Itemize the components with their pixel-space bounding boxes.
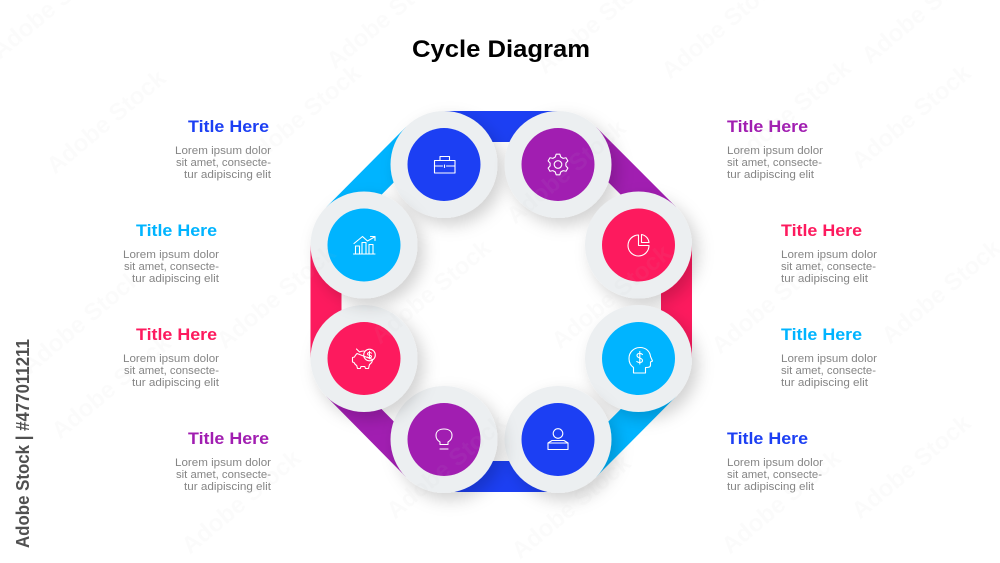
node: growth chart: [310, 192, 418, 298]
icon: growth chart: [354, 236, 375, 254]
icon: person: [548, 429, 568, 450]
text block: right 3: [781, 325, 877, 389]
text block: right 4: [727, 429, 823, 493]
text block: left 2: Lorem ipsum dolor: [123, 249, 219, 261]
icon: light bulb: [436, 429, 452, 449]
watermark pattern: Adobe Stock: [42, 64, 172, 180]
text block: left 1: tur adipiscing elit: [184, 169, 271, 181]
text block: right 3: Lorem ipsum dolor: [781, 353, 877, 365]
ring segment: bottom-left purple: [326, 375, 428, 477]
text block: right 2: tur adipiscing elit: [781, 273, 868, 285]
watermark pattern: Adobe Stock: [717, 444, 847, 560]
icon: pie chart: [628, 234, 649, 256]
text block: left 2: [123, 221, 219, 285]
text block: left 1: [175, 117, 271, 181]
node: gear: [504, 111, 612, 218]
watermark pattern: Adobe Stock: [212, 239, 342, 355]
text block: left 2: Title Here: [136, 221, 217, 240]
text block: right 2: Title Here: [781, 221, 862, 240]
node: piggy bank: [310, 305, 418, 412]
text block: left 3: Title Here: [136, 325, 217, 344]
node: briefcase: [390, 111, 498, 218]
text block: left 1: sit amet, consecte-: [176, 157, 271, 169]
watermark pattern: Adobe Stock: [47, 329, 177, 445]
icon: gear: [548, 154, 568, 175]
text block: left 4: Lorem ipsum dolor: [175, 457, 271, 469]
watermark pattern: Adobe Stock: [727, 54, 857, 170]
watermark pattern: Adobe Stock: [382, 409, 512, 525]
text block: right 3: tur adipiscing elit: [781, 377, 868, 389]
text block: left 4: sit amet, consecte-: [176, 469, 271, 481]
text block: right 4: Lorem ipsum dolor: [727, 457, 823, 469]
ring segment: left crimson: [310, 245, 342, 358]
octagon ring: [310, 111, 692, 492]
watermark pattern: Adobe Stock: [847, 59, 977, 175]
node: pie chart: [585, 192, 692, 298]
text block: left 4: [175, 429, 271, 493]
text block: left 2: tur adipiscing elit: [132, 273, 219, 285]
text block: right 1: Title Here: [727, 117, 808, 136]
watermark pattern: Adobe Stock: [547, 239, 677, 355]
icon: piggy bank: [352, 349, 375, 368]
text block: left 1: Lorem ipsum dolor: [175, 145, 271, 157]
text block: right 1: Lorem ipsum dolor: [727, 145, 823, 157]
stock credit: Adobe Stock | #477011211: [13, 339, 33, 548]
text block: right 2: Lorem ipsum dolor: [781, 249, 877, 261]
text block: left 3: [123, 325, 219, 389]
text block: right 1: tur adipiscing elit: [727, 169, 814, 181]
watermark pattern: Adobe Stock: [707, 244, 837, 360]
text block: left 1: Title Here: [188, 117, 269, 136]
icon: briefcase: [434, 156, 455, 173]
text block: right 4: Title Here: [727, 429, 808, 448]
text block: right 2: [781, 221, 877, 285]
text block: left 2: sit amet, consecte-: [124, 261, 219, 273]
text block: left 4: Title Here: [188, 429, 269, 448]
watermark pattern: Adobe Stock: [17, 264, 147, 380]
text block: left 3: Lorem ipsum dolor: [123, 353, 219, 365]
text block: right 3: Title Here: [781, 325, 862, 344]
watermark pattern: Adobe Stock: [507, 449, 637, 563]
ring segment: top blue: [444, 111, 558, 142]
watermark pattern: Adobe Stock: [502, 114, 632, 230]
text block: right 1: sit amet, consecte-: [727, 157, 822, 169]
text block: right 3: sit amet, consecte-: [781, 365, 876, 377]
node: person: [504, 386, 612, 493]
node: head with dollar: [585, 305, 692, 412]
ring segment: bottom blue: [444, 461, 558, 492]
title: Cycle Diagram: [412, 36, 590, 63]
node: light bulb: [390, 386, 498, 493]
text block: left 3: sit amet, consecte-: [124, 365, 219, 377]
icon: head with dollar: [629, 348, 652, 373]
text block: right 4: tur adipiscing elit: [727, 481, 814, 493]
text block: left 4: tur adipiscing elit: [184, 481, 271, 493]
text block: left 3: tur adipiscing elit: [132, 377, 219, 389]
ring segment: bottom-right cyan: [574, 375, 676, 477]
ring segment: top-right purple: [574, 127, 676, 229]
watermark pattern: Adobe Stock: [237, 59, 367, 175]
text block: right 1: [727, 117, 823, 181]
ring segment: right crimson: [661, 245, 692, 358]
text block: right 4: sit amet, consecte-: [727, 469, 822, 481]
watermark pattern: Adobe Stock: [367, 234, 497, 350]
watermark pattern: Adobe Stock: [177, 444, 307, 560]
watermark pattern: Adobe Stock: [847, 409, 977, 525]
text block: right 2: sit amet, consecte-: [781, 261, 876, 273]
ring segment: top-left cyan: [326, 127, 428, 229]
